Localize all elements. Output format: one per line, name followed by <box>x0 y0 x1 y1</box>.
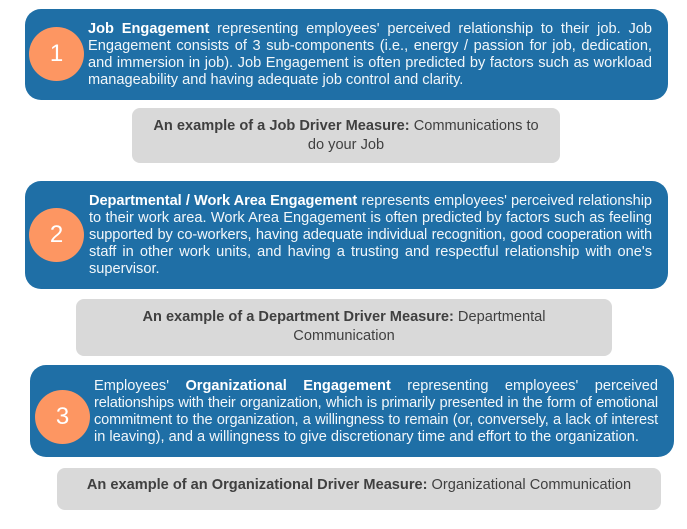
callout: department driver measure example <box>76 299 612 356</box>
text: organizational engagement description: Employees' Organizational Engagement representing employees' perceived <box>94 378 658 394</box>
text: organizational engagement description: relationships with their organization, which is primarily presented in the form of emotional <box>94 395 658 411</box>
callout: job driver measure example: An example of a Job Driver Measure: Communications to <box>153 118 539 134</box>
icon: number 1 circle <box>29 27 84 81</box>
panel: departmental engagement <box>25 181 668 289</box>
callout: job driver measure example: do your Job <box>308 137 384 153</box>
text: departmental engagement description: Departmental / Work Area Engagement represents employees' perceived relationship <box>89 193 652 209</box>
callout: organizational driver measure example: An example of an Organizational Driver Measure: Organizational Communication <box>87 477 631 493</box>
text: job engagement description <box>88 21 652 88</box>
icon: number 1 circle: 1 <box>50 40 63 67</box>
text: departmental engagement description <box>89 193 652 277</box>
text: job engagement description: Engagement consists of 3 sub-components (i.e., energy / passion for job, dedication, <box>88 38 652 54</box>
text: departmental engagement description: supervisor. <box>89 261 160 277</box>
text: organizational engagement description: in leaving), and a willingness to give discretionary time and effort to the organization. <box>94 429 639 445</box>
icon: number 2 circle: 2 <box>50 221 63 248</box>
callout: department driver measure example: An example of a Department Driver Measure: Departmental <box>142 309 546 325</box>
text: organizational engagement description <box>94 378 658 445</box>
callout: department driver measure example: Communication <box>293 328 395 344</box>
callout: job driver measure example <box>132 108 560 163</box>
text: job engagement description: manageability and having adequate job control and clarity. <box>88 72 463 88</box>
panel: organizational engagement <box>30 365 674 457</box>
text: departmental engagement description: staff in other work units, and having a trusting and respectful relationship with one's <box>89 244 652 260</box>
icon: number 3 circle <box>35 390 90 444</box>
icon: number 3 circle: 3 <box>56 403 69 430</box>
callout: organizational driver measure example <box>57 468 661 510</box>
text: job engagement description: and immersion in job). Job Engagement is often predicted by factors such as workload <box>88 55 652 71</box>
icon: number 2 circle <box>29 208 84 262</box>
text: departmental engagement description: supported by co-workers, having adequate individual recognition, good cooperation with <box>89 227 652 243</box>
text: departmental engagement description: to their work area. Work Area Engagement is often predicted by factors such as feeling <box>89 210 652 226</box>
panel: job engagement <box>25 9 668 100</box>
text: job engagement description: Job Engagement representing employees' perceived relationship to their job. Job <box>88 21 652 37</box>
text: organizational engagement description: commitment to the organization, a willingness to remain (or, conversely, a lack of interest <box>94 412 658 428</box>
